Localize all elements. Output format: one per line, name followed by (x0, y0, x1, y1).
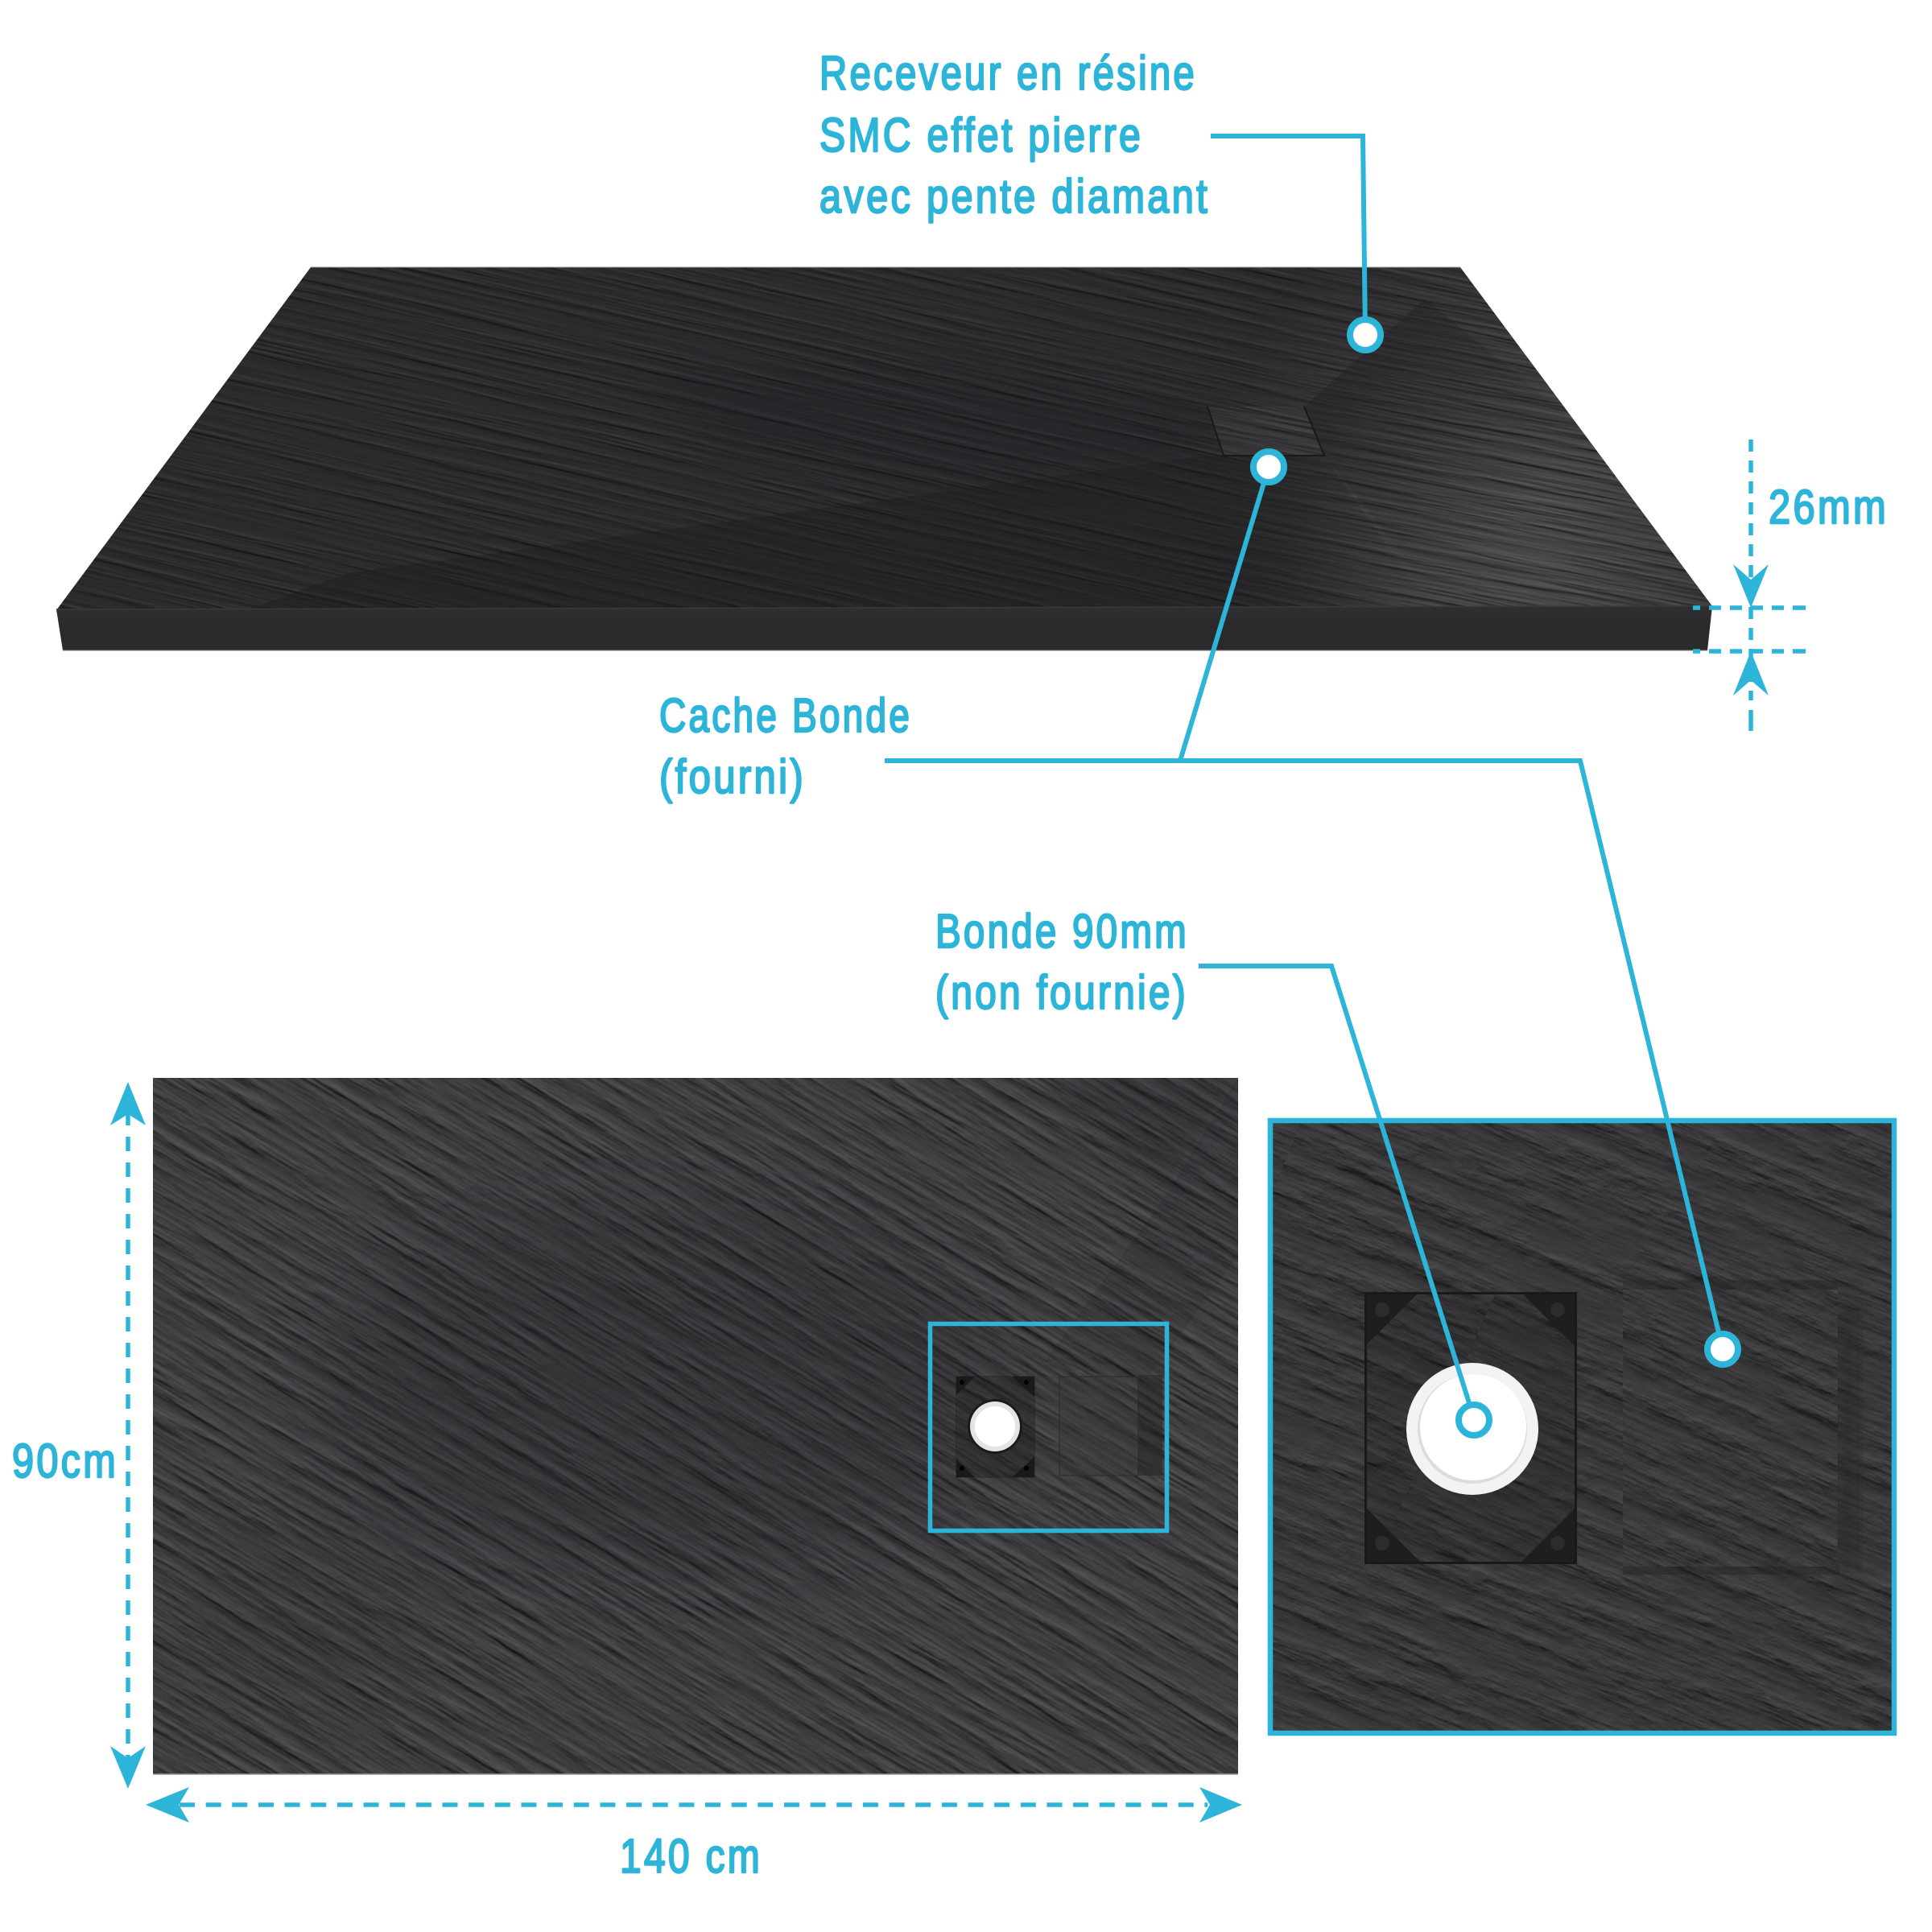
inset frame (1270, 1121, 1894, 1733)
callout text: cache bonde: (fourni) (659, 750, 806, 803)
marker: cache bonde on inset (1707, 1334, 1738, 1364)
callout text: bonde (935, 905, 1189, 1019)
callout text: bonde: (non fournie) (935, 966, 1188, 1019)
label: 26mm: 26mm (1769, 481, 1889, 534)
inset slate background (1270, 1121, 1894, 1733)
leader line: bonde (1199, 966, 1470, 1406)
callout text: receveur (819, 47, 1210, 223)
perspective shower tray (56, 267, 1712, 650)
marker: receveur (1350, 320, 1381, 350)
label: 140 cm: 140 cm (620, 1830, 762, 1883)
callout text: cache bonde (659, 689, 912, 803)
leader line: receveur (1211, 136, 1365, 335)
small drain plate (956, 1377, 1034, 1477)
dimension: width 140 cm (146, 1787, 1242, 1883)
flat top view of tray (153, 1078, 1238, 1774)
cache bonde in perspective (1208, 407, 1324, 456)
detail frame on flat view (931, 1323, 1167, 1531)
dimension: thickness 26mm (1693, 440, 1889, 731)
marker: cache bonde on tray (1253, 452, 1284, 482)
inset drain cover (1623, 1290, 1838, 1567)
small drain cover (1059, 1375, 1162, 1476)
callout text: receveur: Receveur en résine (819, 47, 1197, 100)
label: 90cm: 90cm (12, 1435, 118, 1488)
inset drain plate (1364, 1292, 1577, 1564)
callout text: bonde: Bonde 90mm (935, 905, 1189, 958)
zoom inset (1270, 1121, 1894, 1733)
dimension: depth 90cm (12, 1082, 146, 1789)
callout: receveur (819, 47, 1381, 350)
callout: cache bonde (659, 452, 1738, 1364)
tray top surface (56, 267, 1712, 612)
tray front edge (56, 606, 1712, 650)
callout text: receveur: avec pente diamant (819, 170, 1210, 223)
leader line: cache bonde (885, 761, 1723, 1349)
inset white drain (1406, 1363, 1538, 1495)
callout text: cache bonde: Cache Bonde (659, 689, 912, 742)
marker: bonde (1459, 1405, 1489, 1435)
callout text: receveur: SMC effet pierre (819, 109, 1143, 162)
slate texture (153, 1078, 1238, 1774)
leader branch to perspective tray (1180, 467, 1269, 761)
callout: bonde (935, 905, 1489, 1435)
